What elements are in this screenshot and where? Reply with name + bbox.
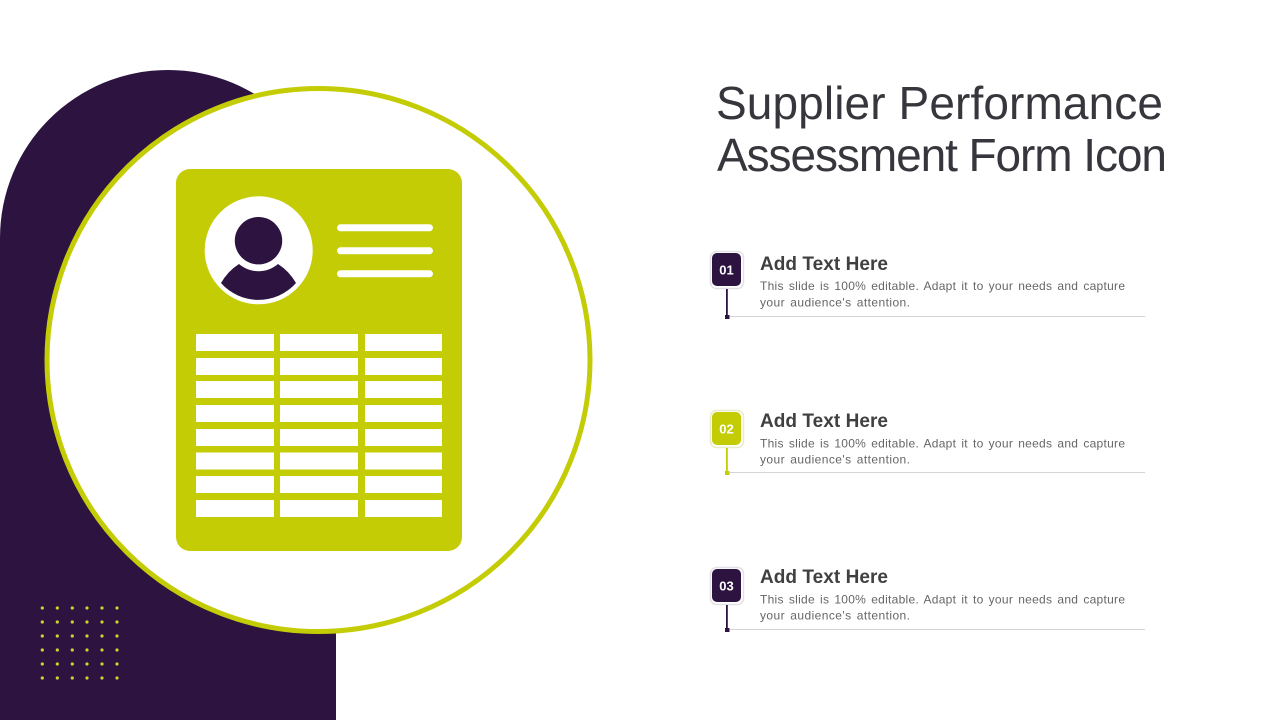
number badge 02 (710, 410, 744, 448)
number badge 01 (710, 252, 744, 288)
dark arch background shape (0, 70, 336, 720)
number badge 01: 01 (719, 262, 734, 278)
description: This slide is 100% editable. Adapt it to your needs and capture (760, 436, 1125, 450)
number badge 03: 03 (719, 578, 734, 594)
icon: assessment form (176, 169, 462, 551)
list item 01 (710, 252, 1145, 319)
description: This slide is 100% editable. Adapt it to your needs and capture (760, 592, 1125, 606)
description (760, 436, 1125, 466)
connector (725, 289, 1145, 319)
header text lines (337, 224, 433, 277)
description: your audience's attention. (760, 608, 910, 622)
heading: Add Text Here (760, 411, 888, 432)
large outlined circle (47, 88, 590, 632)
description: your audience's attention. (760, 452, 910, 466)
form table (196, 334, 442, 517)
dot grid decoration (41, 606, 119, 680)
description (760, 279, 1125, 310)
form card (176, 169, 462, 551)
icon: user avatar (205, 196, 313, 304)
number badge 03 (710, 568, 744, 604)
title: Supplier Performance (716, 77, 1163, 129)
title: Assessment Form Icon (717, 129, 1167, 181)
description: your audience's attention. (760, 296, 910, 310)
connector (725, 605, 1145, 632)
connector (725, 448, 1145, 475)
heading: Add Text Here (760, 254, 888, 275)
list item 03 (710, 567, 1145, 632)
title (716, 77, 1167, 181)
number badge 02: 02 (719, 422, 734, 436)
description: This slide is 100% editable. Adapt it to your needs and capture (760, 279, 1125, 293)
description (760, 592, 1125, 622)
list item 02 (710, 410, 1145, 475)
heading: Add Text Here (760, 567, 888, 588)
